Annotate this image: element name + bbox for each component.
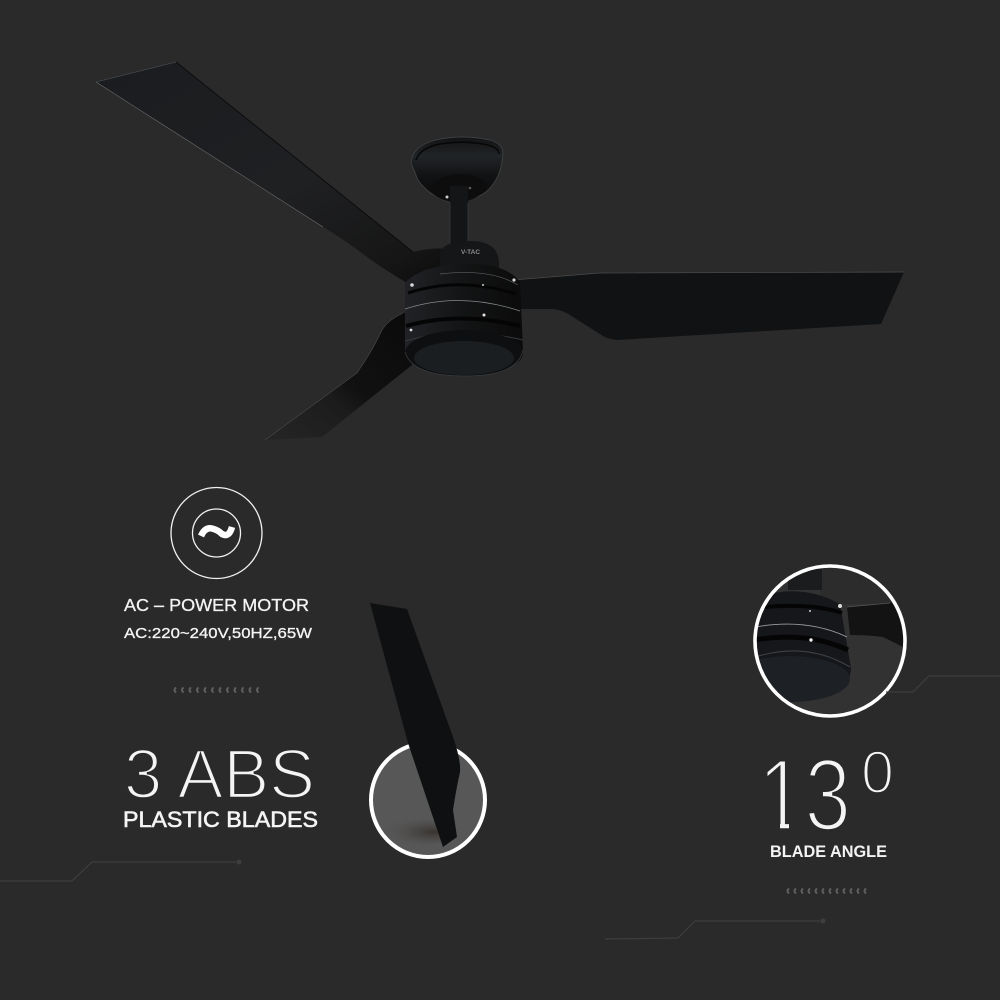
decorative crescent row bbox=[788, 888, 866, 894]
icon: AC sine wave in double circle bbox=[171, 488, 262, 578]
voltage specification: AC:220~240V,50HZ,65W bbox=[124, 625, 313, 642]
fan blade: lower left bbox=[265, 312, 414, 440]
degree mark: 0 bbox=[861, 739, 894, 806]
fan blade: upper left bbox=[96, 62, 462, 285]
big number: 13: 13 bbox=[758, 738, 851, 852]
single blade bbox=[370, 603, 460, 847]
decorative crescent row bbox=[174, 688, 258, 692]
feature: 3 ABS plastic blades bbox=[123, 735, 318, 832]
blade angle close-up bbox=[730, 566, 905, 716]
feature: 13 degree blade angle bbox=[758, 738, 894, 861]
motor housing bbox=[405, 241, 523, 376]
circuit line: right bbox=[886, 676, 1000, 692]
down rod bbox=[450, 186, 468, 250]
blade in zoom bbox=[847, 600, 905, 648]
blade close-up bbox=[364, 603, 485, 857]
motor in zoom bbox=[757, 591, 851, 676]
feature: AC power motor bbox=[124, 488, 313, 642]
ceiling fan product bbox=[96, 62, 904, 440]
label: blade angle: BLADE ANGLE bbox=[770, 843, 887, 861]
big heading: 3 ABS: 3 ABS bbox=[124, 735, 315, 813]
circuit line: bottom right bbox=[605, 918, 826, 939]
heading: AC power motor: AC – POWER MOTOR bbox=[124, 595, 309, 615]
motor housing: V-TAC bbox=[461, 249, 480, 256]
circle backdrop bbox=[364, 743, 485, 857]
circuit line: left bbox=[0, 860, 242, 881]
ceiling canopy bbox=[411, 137, 503, 203]
subheading: plastic blades: PLASTIC BLADES bbox=[123, 807, 318, 832]
fan blade: right bbox=[513, 272, 904, 340]
